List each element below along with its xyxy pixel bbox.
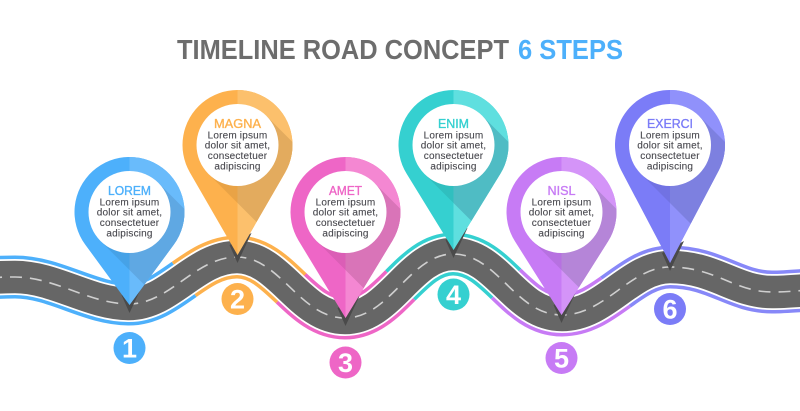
- pin 6: EXERCI: adipiscing: [647, 161, 693, 172]
- step number 1: 1: [122, 334, 137, 364]
- pin 1: LOREM: adipiscing: [106, 228, 153, 239]
- step number 4: [438, 278, 470, 310]
- pin 2: MAGNA: Lorem ipsum: [208, 130, 267, 142]
- step number 2: 2: [230, 284, 245, 314]
- pin 6: EXERCI: dolor sit amet,: [637, 141, 703, 152]
- pin 4: ENIM: ENIM: [438, 117, 469, 131]
- pin 4: ENIM: consectetuer: [424, 151, 484, 162]
- step number 4: 4: [446, 280, 461, 310]
- pin 1: LOREM: [74, 157, 184, 312]
- pin 3: AMET: [290, 157, 400, 326]
- step number 5: [546, 342, 578, 374]
- step number 5: 5: [554, 344, 569, 374]
- step number 6: [654, 293, 686, 325]
- pin 5: NISL: Lorem ipsum: [532, 198, 591, 208]
- pin 4: ENIM: dolor sit amet,: [421, 141, 486, 152]
- pin 1: LOREM: dolor sit amet,: [97, 208, 162, 219]
- pin 3: AMET: consectetuer: [316, 218, 376, 229]
- step number 2: [222, 283, 254, 315]
- pin 4: ENIM: [398, 90, 508, 258]
- pin 2: MAGNA: dolor sit amet,: [205, 141, 270, 152]
- step number 1: [114, 332, 146, 364]
- pin 6: EXERCI: [615, 90, 725, 270]
- winding road: [0, 254, 800, 318]
- pin 5: NISL: consectetuer: [532, 218, 592, 229]
- pin 5: NISL: dolor sit amet,: [529, 208, 594, 219]
- pin 2: MAGNA: adipiscing: [214, 161, 261, 172]
- pin 2: MAGNA: consectetuer: [208, 151, 268, 162]
- pin 1: LOREM: Lorem ipsum: [100, 198, 159, 208]
- pin 4: ENIM: Lorem ipsum: [424, 130, 483, 142]
- pin 5: NISL: NISL: [547, 184, 576, 198]
- pin 4: ENIM: adipiscing: [430, 161, 477, 172]
- step number 6: 6: [662, 294, 678, 324]
- pin 5: NISL: [506, 157, 616, 322]
- pin 1: LOREM: consectetuer: [100, 218, 160, 229]
- pin 3: AMET: Lorem ipsum: [316, 198, 375, 208]
- step number 3: [330, 346, 362, 378]
- pin 6: EXERCI: EXERCI: [647, 117, 693, 131]
- pin 6: EXERCI: Lorem ipsum: [640, 130, 700, 142]
- pin 1: LOREM: LOREM: [108, 184, 151, 198]
- pin 2: MAGNA: [182, 90, 292, 262]
- title: TIMELINE ROAD CONCEPT: [177, 34, 509, 65]
- pin 2: MAGNA: MAGNA: [214, 117, 262, 131]
- pin 3: AMET: adipiscing: [322, 228, 369, 239]
- title: 6 STEPS: [518, 34, 623, 65]
- pin 6: EXERCI: consectetuer: [640, 151, 700, 162]
- pin 5: NISL: adipiscing: [538, 228, 585, 239]
- pin 3: AMET: AMET: [329, 184, 362, 198]
- pin 3: AMET: dolor sit amet,: [313, 208, 378, 219]
- step number 3: 3: [338, 348, 353, 378]
